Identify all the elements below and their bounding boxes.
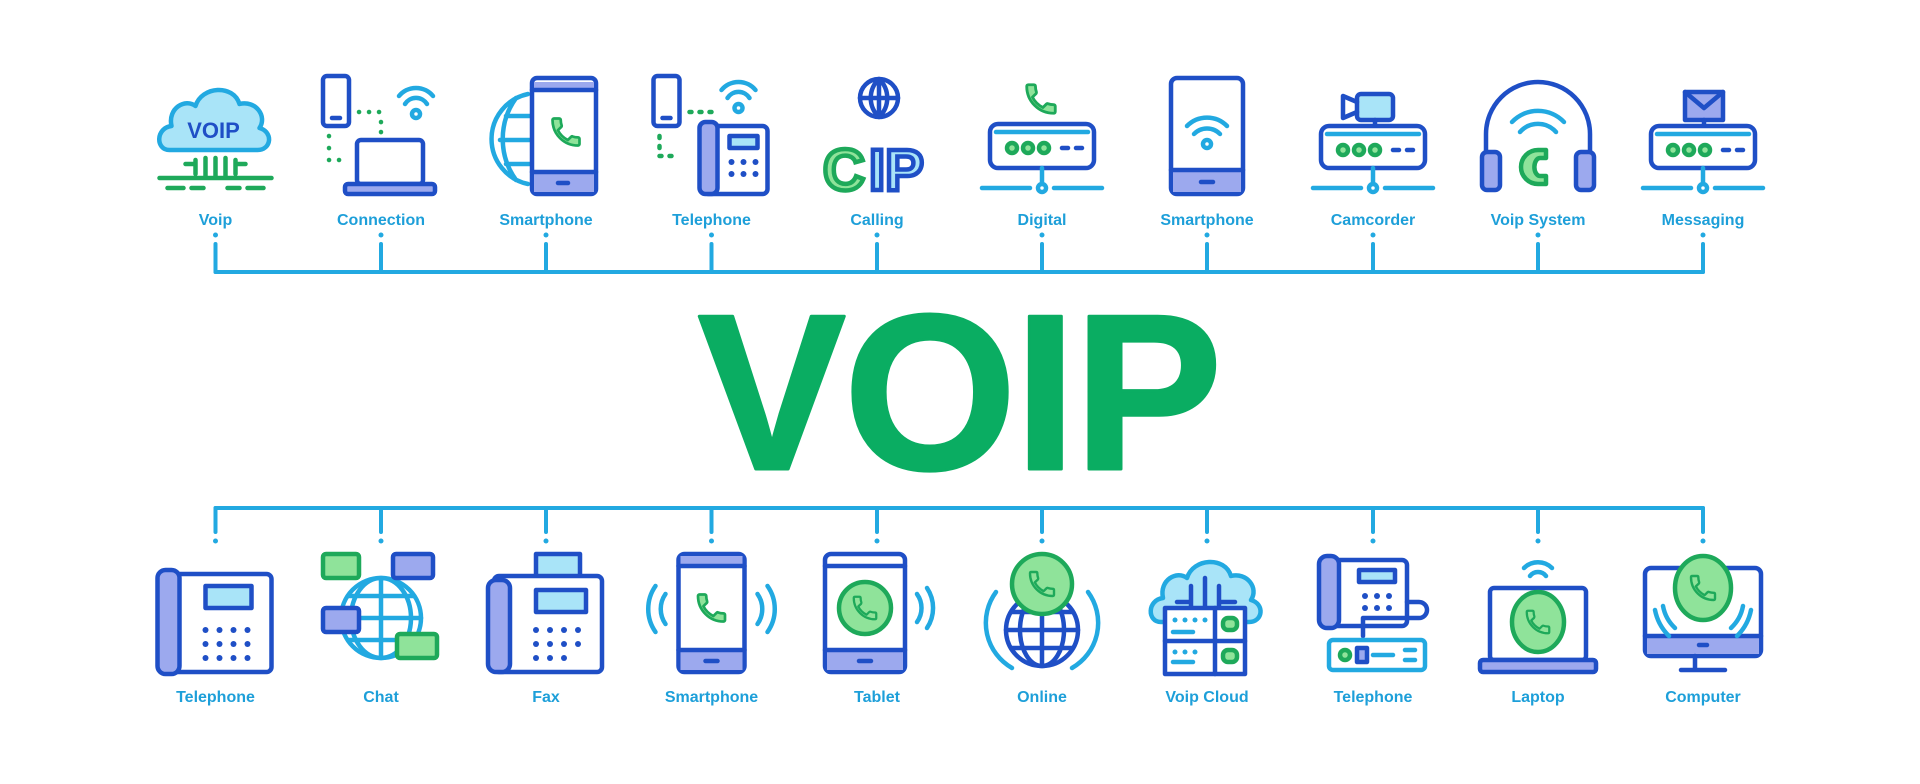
label: Tablet: Tablet — [854, 689, 901, 706]
icon: smartphone ringing — [648, 554, 775, 672]
icon: smartphone with globe — [492, 78, 596, 194]
label: Computer: Computer — [1665, 689, 1741, 706]
label: Smartphone: Smartphone — [665, 689, 758, 706]
title: VOIP — [698, 269, 1220, 517]
label: Laptop: Laptop — [1511, 689, 1565, 706]
icon: telephone with wifi — [654, 76, 768, 194]
label: Smartphone: Smartphone — [1160, 212, 1254, 229]
label: Smartphone: Smartphone — [499, 212, 593, 229]
top connector lines — [216, 244, 1703, 532]
icon: digital router — [982, 85, 1102, 192]
label: Calling: Calling — [850, 212, 904, 229]
label: Voip System: Voip System — [1491, 212, 1585, 229]
icon: connection — [323, 76, 435, 194]
icon: voip system headset — [1482, 82, 1594, 190]
label: Voip: Voip — [199, 212, 232, 229]
label: Camcorder: Camcorder — [1331, 212, 1415, 229]
icon: tablet — [825, 554, 933, 672]
label: Chat: Chat — [363, 689, 399, 706]
label: Online: Online — [1017, 689, 1067, 706]
icon: voip cloud: VOIP — [187, 118, 240, 143]
icon: camcorder router — [1313, 94, 1433, 192]
icon: calling CIP: C — [823, 138, 865, 203]
icon: laptop call — [1480, 562, 1596, 672]
icon: voip cloud servers — [1151, 562, 1261, 674]
icon: chat globe — [323, 554, 437, 658]
icon: voip cloud — [159, 90, 272, 188]
label: Telephone: Telephone — [672, 212, 751, 229]
label: Connection: Connection — [337, 212, 425, 229]
icon: fax — [488, 554, 602, 672]
icon: telephone on router — [1319, 556, 1427, 670]
label: Voip Cloud: Voip Cloud — [1165, 689, 1249, 706]
label: Messaging: Messaging — [1662, 212, 1744, 229]
icon: smartphone wifi — [1171, 78, 1243, 194]
icon: desk telephone — [158, 570, 272, 674]
icon: messaging router — [1643, 92, 1763, 192]
icon: calling CIP — [823, 79, 924, 203]
label: Fax: Fax — [532, 689, 560, 706]
icon: calling CIP: IP — [869, 138, 924, 203]
icon: computer call — [1645, 556, 1761, 670]
label: Digital: Digital — [1018, 212, 1066, 229]
label: Telephone: Telephone — [176, 689, 255, 706]
icon: online globe — [986, 554, 1098, 668]
label: Telephone: Telephone — [1334, 689, 1413, 706]
